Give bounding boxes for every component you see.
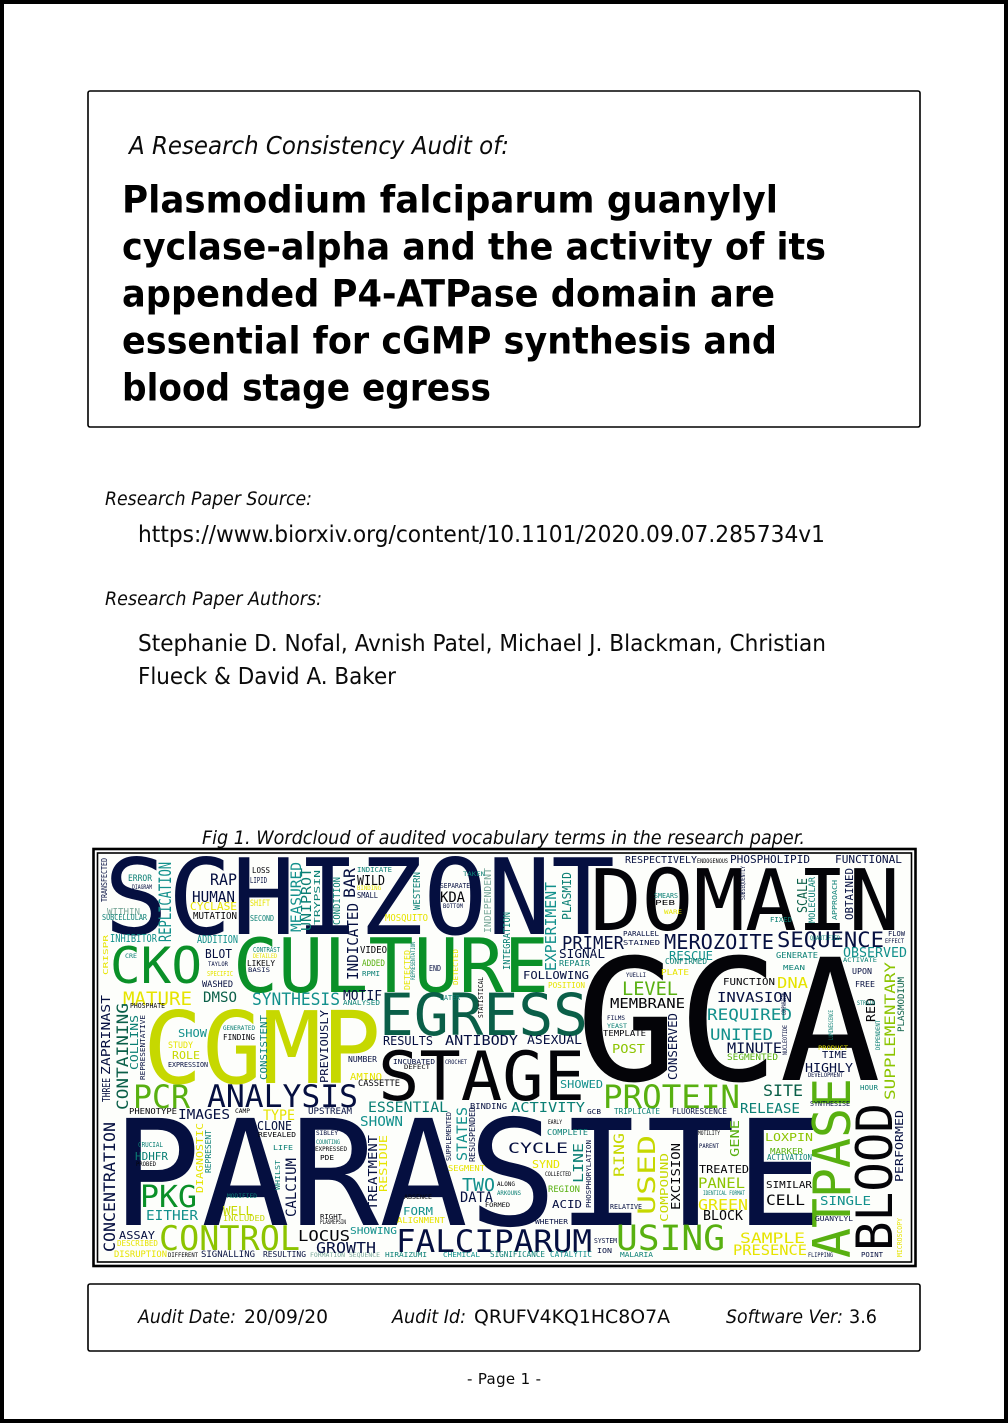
minor words: TREATED [699,1163,749,1176]
minor words: HIRAIZUMI [385,1251,427,1259]
chart: wordcloud [94,837,916,1266]
minor words: BOTTOM [443,903,463,910]
minor words: FUNCTIONAL [835,853,902,866]
minor words: SEPARATE [440,882,470,890]
minor words: RESULTING [263,1250,306,1259]
minor words: ACTIVITY [511,1101,585,1116]
word: EGRESS: EGRESS [379,981,588,1049]
title: Plasmodium falciparum guanylyl [122,178,778,222]
minor words: LIKELY [247,959,275,968]
minor words: CLONE [257,1119,292,1133]
minor words: SITE [763,1081,803,1100]
minor words: SPECIFIC [207,970,233,978]
minor words: HOUR [860,1084,879,1092]
minor words: WILD [357,874,385,889]
audit date: Audit Date: [136,1306,236,1328]
minor words: RESULTS [383,1034,433,1048]
minor words: MALARIA [620,1251,654,1259]
word: GCA: GCA [576,923,881,1120]
minor words: REQUIRED [707,1005,792,1024]
minor words: PHENOTYPE [129,1107,177,1116]
minor words: RELEASE [740,1102,800,1117]
audit id: Audit Id: [390,1306,466,1328]
minor words: FORM [403,1205,433,1218]
minor words: INDICATE [357,866,392,874]
minor words: COLLINS [128,1015,141,1070]
minor words: ERROR [128,874,153,884]
minor words: SHOWN [360,1115,403,1130]
minor words: FLIPPING [808,1252,833,1259]
minor words: FILMS [607,1015,625,1022]
minor words: TIME [822,1050,847,1061]
minor words: ADDITION [197,933,238,946]
minor words: MATURE [123,988,192,1010]
minor words: INVASION [717,991,792,1006]
minor words: CROCHET [445,1059,467,1066]
minor words: FLUORESCENCE [672,1107,727,1116]
minor words: FORMED [485,1202,510,1209]
word: CONTROL: CONTROL [159,1219,300,1259]
minor words: LATER [440,994,461,1002]
minor words: PREVIOUSLY [318,1010,331,1083]
minor words: MOLECULAR [808,876,818,923]
minor words: INDEPENDENT [483,868,494,933]
minor words: RING [612,1133,628,1177]
minor words: HIGHLY [805,1061,854,1075]
minor words: COMPLETE [547,1128,588,1137]
minor words: REPLICATION [156,862,176,942]
minor words: DEPENDENT [875,1020,882,1050]
word: USING: USING [616,1219,725,1259]
minor words: ROLE [172,1049,200,1062]
minor words: UNITED [710,1025,773,1044]
minor words: ALONG [497,1181,515,1188]
minor words: PLATE [661,968,689,977]
minor words: END [429,964,441,973]
minor words: PLASMID [560,872,574,920]
minor words: PLASMODIUM [897,976,907,1032]
minor words: COMPOUND [658,1153,671,1222]
authors [138,631,826,690]
minor words: ZAPRINAST [99,995,113,1075]
word: PROTEIN: PROTEIN [603,1078,740,1116]
word: SEQUENCE: SEQUENCE [777,928,884,952]
minor words: REGION [548,1185,580,1195]
minor words: TAYLOR [208,961,228,968]
minor words: MOTIF [343,989,382,1004]
minor words: PHOSPHATE [130,1002,165,1010]
minor words: UPSTREAM [308,1107,353,1117]
minor words: LOXPIN [765,1131,813,1144]
title: cyclase-alpha and the activity of its [122,226,826,268]
word: ATPASE: ATPASE [803,1078,863,1258]
word: MEROZOITE: MEROZOITE [664,930,774,954]
minor words: EFFECT [885,938,904,945]
minor words: STAINED [623,939,660,947]
minor words: CYCLASE [190,900,237,913]
audit date: 20/09/20 [244,1306,328,1328]
minor words: PEB [655,899,675,907]
minor words: INDICATED [344,903,362,980]
minor words: ADDED [362,959,385,969]
minor words: LINE [572,1143,587,1183]
figure caption: Fig 1. Wordcloud of audited vocabulary terms in the research paper. [202,827,805,849]
minor words: CONTRAST [253,946,281,954]
minor words: ASSAY [119,1229,155,1242]
minor words: BLOCK [703,1209,743,1224]
minor words: SEGMENTED [727,1053,778,1063]
minor words: WHETHER [535,1218,569,1226]
minor words: REPAIR [559,959,590,968]
minor words: SECOND [250,914,274,923]
minor words: WELL [223,1204,253,1218]
minor words: GUANYLYL [815,1215,853,1223]
minor words: DATA [460,1190,494,1206]
minor words: SIGNIFICANCE [490,1250,545,1259]
minor words: MUTATION [193,911,237,922]
minor words: CHEMICAL [443,1251,480,1259]
source label: Research Paper Source: [105,488,312,510]
minor words: CONFIRMED [665,957,707,966]
minor words: WASHED [202,980,233,990]
minor words: SINGLE [820,1194,871,1208]
minor words: PLASMEPSIN [320,1219,346,1226]
minor words: COMPARISON [781,993,788,1015]
minor words: EXPRESSION [168,1061,208,1069]
authors: Flueck & David A. Baker [138,664,396,690]
minor words: ACID [552,1198,582,1211]
minor words: TYPE [263,1108,295,1124]
minor words: PARALLEL [623,930,659,938]
minor words: UNIPROT [300,868,315,931]
minor words: LOSS [252,866,270,875]
minor words: RESCUE [669,949,713,963]
minor words: DETECTED [452,949,460,985]
minor words: SIGNALLING [201,1250,255,1260]
minor words: WARE [664,909,682,916]
minor words: TWO [462,1175,495,1196]
authors: Stephanie D. Nofal, Avnish Patel, Michael J. Blackman, Christian [138,631,826,657]
minor words: YEAST [607,1023,627,1030]
audit label: A Research Consistency Audit of: [127,131,509,160]
minor words: CRUCIAL [138,1141,163,1149]
minor words: IDENTICAL FORMAT [703,1190,745,1197]
minor words: SIMILAR [766,1180,813,1191]
minor words: POST [612,1042,645,1056]
minor words: BASIS [248,967,270,974]
minor words: TRIPLICATE [614,1107,660,1116]
minor words: MOTILITY [698,1130,720,1137]
panel: audit footer [88,1284,920,1351]
title: blood stage egress [122,366,491,410]
minor words: WESTERN [412,872,423,910]
minor words: DIFFERENT [168,1252,198,1259]
minor words: DEFECT [404,1064,430,1071]
minor words: USED [633,1135,661,1215]
minor words: SUBSEQUENTLY [740,866,747,900]
minor words: PROBED [136,1161,156,1168]
minor words: APPROACH [831,880,839,920]
minor words: SUPPLEMENTED [445,1112,453,1161]
minor words: RAP [210,870,237,889]
minor words: FOLLOWING [523,969,589,982]
minor words: SHOWING [350,1226,397,1237]
minor words: FINDING [223,1033,255,1042]
minor words: INCLUDED [223,1214,265,1223]
minor words: GREEN [698,1196,748,1214]
minor words: STATISTICAL [477,977,485,1018]
minor words: MEAN [783,964,805,972]
minor words: ABSENCE [404,1194,432,1201]
minor words: SIGNAL [559,947,605,961]
minor words: RIGHT [320,1213,343,1221]
minor words: RPMI [362,970,380,978]
minor words: NUCLEOTIDE [782,1025,789,1055]
minor words: OBSERVED [843,946,907,961]
minor words: ESSENTIAL [368,1100,448,1116]
authors label: Research Paper Authors: [105,588,322,610]
minor words: BLOT [205,947,232,961]
minor words: REVEALED [258,1131,296,1139]
minor words: ALIGNMENT [397,1216,445,1225]
minor words: DIAGNOSTIC [195,1123,206,1193]
minor words: CALCIUM [284,1158,300,1217]
software version: 3.6 [849,1306,877,1328]
minor words: IMAGES [178,1108,230,1123]
minor words: SYSTEM [594,1237,617,1245]
minor words: DEVELOPMENT [808,1072,843,1079]
minor words: PDE [320,1154,334,1162]
minor words: CRISPR [102,934,110,975]
word: FALCIPARUM: FALCIPARUM [396,1224,592,1260]
minor words: LOCUS [298,1227,350,1245]
minor words: ANTIBODY [445,1034,518,1049]
minor words: BAR [340,868,359,898]
minor words: GENE [728,1120,742,1157]
minor words [99,853,907,1260]
word: PKG: PKG [140,1180,197,1215]
source url: https://www.biorxiv.org/content/10.1101/2020.09.07.285734v1 [138,522,825,548]
minor words: CONSERVED [666,1013,680,1080]
word: STAGE: STAGE [378,1038,585,1117]
minor words: FORMATION SEQUENCE [310,1252,380,1259]
minor words: CASSETTE [358,1079,400,1089]
minor words: DIAGRAM [132,884,152,891]
minor words: WITHIN [107,907,140,918]
minor words: LEVEL [622,978,678,1000]
minor words: GROWTH [316,1239,376,1257]
panel: title box [88,91,920,427]
minor words: SHOW [178,1027,207,1040]
minor words: BINDING [470,1102,507,1111]
minor words: SYNTHESISE [810,1100,850,1108]
minor words: ACTIVATE [843,957,877,964]
title: appended P4-ATPase domain are [122,272,775,316]
minor words: DETECTED [403,950,412,990]
minor words: RELATIVE [610,1203,642,1211]
minor words: KDA [440,890,466,906]
minor words: REPRESENTATION [410,942,417,980]
minor words: PRESENCE [733,1243,807,1259]
minor words: QUANTIFIED [810,935,840,942]
minor words: MINUTE [727,1041,782,1057]
minor words: ANALYSED [343,999,380,1007]
minor words: NUMBER [348,1055,377,1064]
minor words: PANEL [698,1176,745,1192]
minor words: PARENT [699,1143,719,1150]
minor words: SAMPLE [740,1231,805,1247]
minor words: EXCISION [669,1143,683,1210]
minor words: STRAIN [857,1000,875,1007]
minor words: CONCENTRATION [100,1122,119,1252]
minor words: CONDITION [332,877,343,925]
minor words: INHIBITOR [110,932,157,945]
minor words: SUPPLEMENTARY [883,961,899,1100]
minor words: FLOW [888,930,906,938]
minor words: CONTAINING [113,1003,132,1110]
minor words: TEMPLATE [603,1029,646,1038]
minor words: SUBCELLULAR [102,913,147,922]
minor words: COUNTING [316,1139,340,1146]
minor words: MICROSCOPY [896,1217,904,1257]
minor words: PHOSPHORYLATION [585,1140,593,1208]
minor words: SIBLEY [316,1130,338,1137]
minor words: POINT [861,1251,884,1259]
minor words: VIDEO [360,945,387,956]
minor words: RESUSPENDED [468,1107,477,1162]
word: BLOOD: BLOOD [846,1103,904,1251]
minor words: ION [597,1247,612,1255]
minor words: SYND [532,1158,560,1171]
minor words: CELL [766,1193,805,1209]
minor words: YUELLI [626,972,646,979]
minor words: RESIDUE [377,1135,390,1192]
minor words: EXPERIMENT [542,882,560,971]
title: essential for cGMP synthesis and [122,320,777,362]
minor words: SCALE [796,878,811,913]
word: CULTURE: CULTURE [233,922,549,1010]
minor words: FREE [855,980,875,989]
minor words: COLLECTED [545,1171,571,1178]
minor words: GENERATE [776,951,818,960]
minor words: MARKER [770,1147,803,1156]
minor words: SMALL [357,891,378,900]
minor words: MEASURED [289,862,305,932]
minor words: TREATMENT [366,1135,380,1210]
word: DOMAIN: DOMAIN [590,852,900,951]
minor words: LIFE [273,1144,293,1152]
minor words: SHIFT [250,899,270,909]
minor words: CRE [125,953,137,960]
minor words: FIXED [770,916,792,924]
minor words: HDHFR [135,1150,168,1163]
minor words: TAKEN [463,871,485,878]
minor words: INCUBATED [393,1058,435,1066]
word: PCR: PCR [133,1078,191,1116]
minor words: INTEGRATION [502,912,513,970]
page number: - Page 1 - [467,1370,541,1388]
minor words: DETAILED [253,953,277,960]
minor words: SHOWED [560,1078,603,1091]
minor words: PHOSPHOLIPID [730,853,810,866]
audit id: QRUFV4KQ1HC8O7A [474,1306,670,1328]
minor words: STUDY [168,1041,194,1051]
minor words: CONSISTENT [259,1015,270,1080]
minor words: HUMAN [192,888,235,906]
minor words: EXPRESSED [315,1146,347,1153]
minor words: PERFORMED [893,1110,906,1182]
minor words: FUNCTION [723,977,775,988]
minor words: GENERATED [223,1025,255,1032]
audit id [390,1306,670,1328]
minor words: CATALYTIC [550,1250,592,1259]
minor words: POSITION [548,981,585,990]
minor words: DESCRIBED [117,1239,158,1248]
minor words: DMSO [203,990,237,1006]
minor words: AMINO [350,1072,382,1083]
minor words: DNA [777,974,808,992]
minor words: CAMP [235,1108,250,1115]
word: PRIMER: PRIMER [562,933,624,954]
minor words: LIPID [250,876,267,885]
minor words: ACTIVATION [767,1153,812,1162]
software version: Software Ver: [726,1306,843,1328]
minor words: EITHER [146,1209,198,1224]
minor words: PRODUCT [818,1045,848,1052]
minor words: WHILST [274,1159,282,1190]
minor words: THREE [100,1078,113,1102]
minor words: REPRESENTATIVE [139,1015,147,1080]
minor words: STATES [455,1107,471,1161]
minor words: EARLY [548,1119,562,1126]
audit date [136,1306,328,1328]
word: ANALYSIS: ANALYSIS [207,1079,358,1115]
word: CKO: CKO [110,937,202,995]
minor words: MEMBRANE [610,997,685,1012]
minor words: OBTAINED [843,868,856,920]
minor words: MODIFIED [227,1193,257,1200]
minor words: REPRESENT [204,1130,213,1173]
minor words: MOSQUITO [385,913,428,924]
minor words: ARKOUNS [497,1190,521,1197]
minor words: TRANSFECTED [100,858,109,902]
minor words: LUMINESCENCE [828,1010,835,1040]
minor words: SEGMENT [448,1164,485,1173]
minor words: RED [864,998,878,1022]
minor words: BINDING [357,885,381,892]
word: PARASITE: PARASITE [112,1089,824,1260]
title [122,178,826,410]
minor words: CYCLE [508,1141,568,1157]
minor words: SYNTHESIS [252,990,340,1010]
word: CGMP: CGMP [143,990,381,1107]
minor words: RESPECTIVELY [625,855,697,866]
minor words: DISRUPTION [114,1250,167,1260]
minor words: UPON [852,967,872,976]
minor words: SMEARS [654,892,678,900]
minor words: ASEXUAL [527,1033,582,1047]
minor words: GCB [587,1108,601,1116]
word: SCHIZONT: SCHIZONT [104,837,615,959]
minor words: ENDOGENOUS [697,858,728,865]
minor words: TRYPSIN [313,870,322,925]
